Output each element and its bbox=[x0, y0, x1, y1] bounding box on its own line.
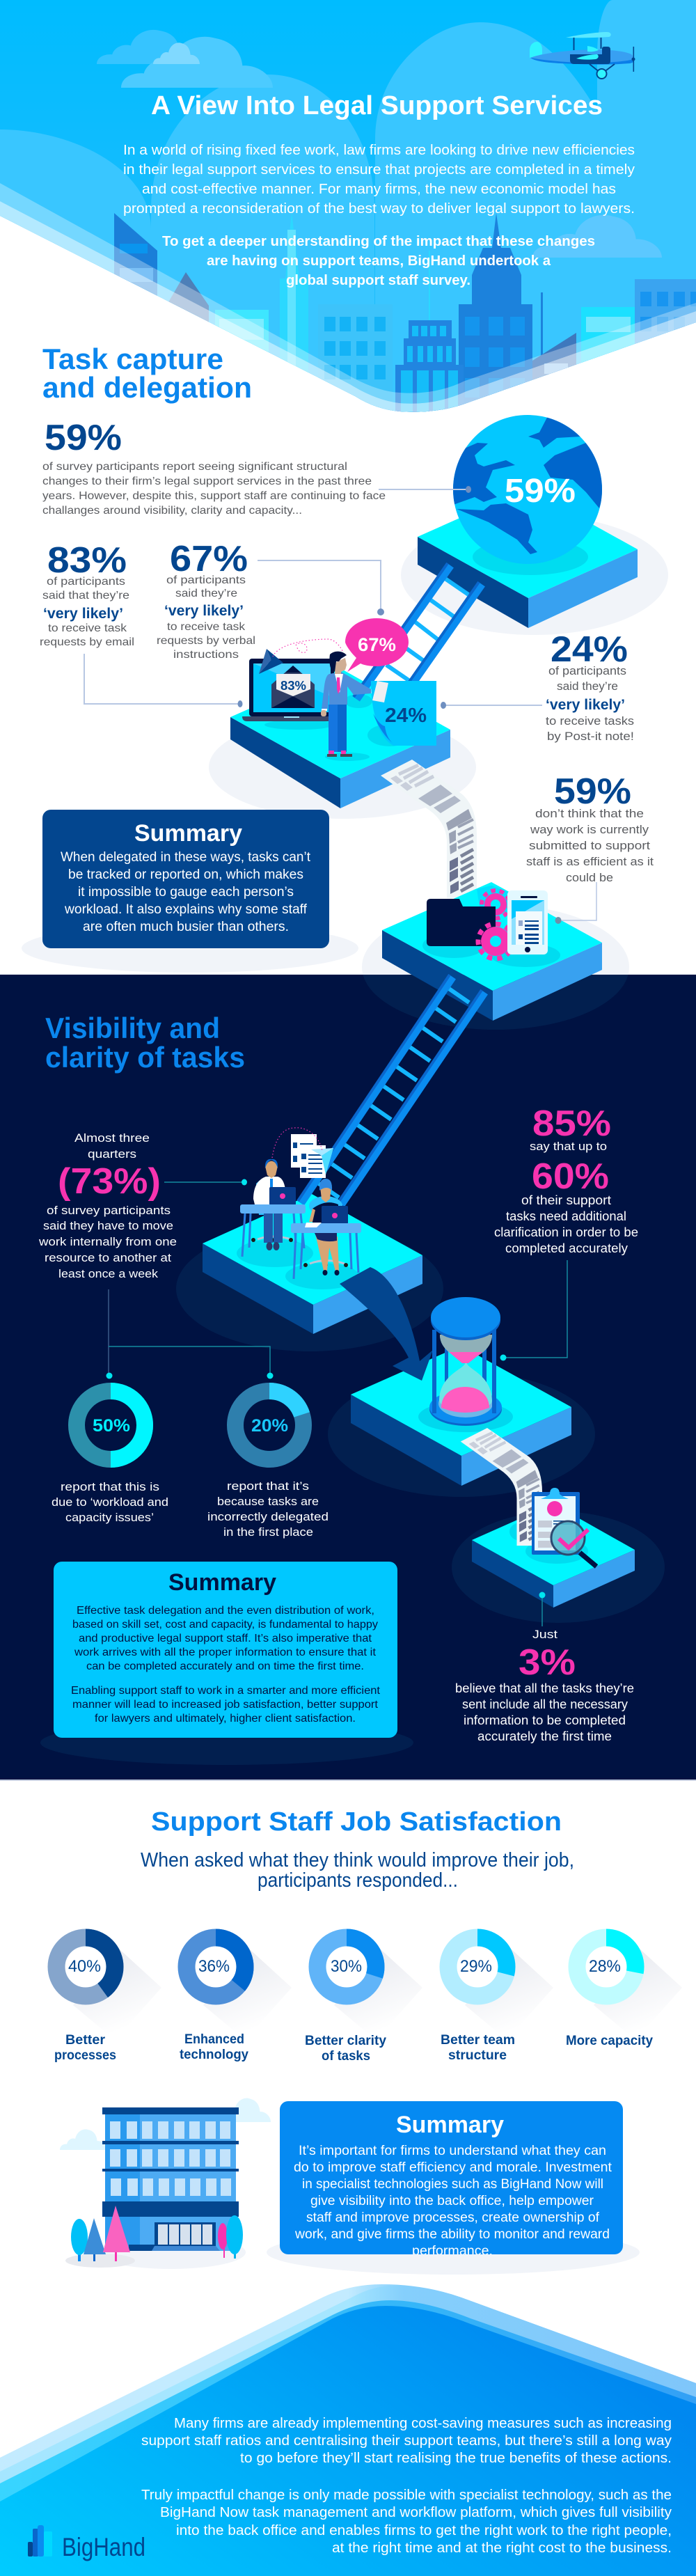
connector lines for task capture bbox=[84, 486, 542, 709]
donut chart: 36 percent enhanced technology: technology bbox=[180, 2048, 248, 2062]
connector lines for visibility section bbox=[106, 1179, 567, 1626]
donut chart: 30 percent better clarity: of tasks bbox=[322, 2049, 370, 2064]
summary box 2: for lawyers and ultimately, higher client satisfaction. bbox=[95, 1713, 356, 1725]
stat: 24 percent post-it: 24% bbox=[551, 629, 628, 670]
connector: 59 percent to platform 3 bbox=[555, 882, 596, 924]
icon: left city buildings bbox=[114, 212, 393, 418]
icon: clipboard and magnifier bbox=[532, 1488, 596, 1566]
subheading: participants responded: participants responded... bbox=[258, 1869, 458, 1892]
icon: post-it note bbox=[371, 681, 436, 746]
summary box 3: in specialist technologies such as BigHand Now will bbox=[302, 2177, 603, 2192]
stat: 83 percent email: to receive task bbox=[48, 622, 127, 634]
stat: 67 percent verbal: 67% bbox=[170, 539, 248, 579]
stat: 67 percent verbal: of participants bbox=[166, 574, 246, 586]
stat: 83 percent email: requests by email bbox=[40, 636, 134, 648]
speech bubble: 67 percent: 67% bbox=[358, 634, 396, 655]
platform 1 with globe bbox=[401, 411, 668, 635]
icon: hourglass bbox=[418, 1297, 513, 1432]
heading: support staff job satisfaction: Support Staff Job Satisfaction bbox=[151, 1807, 562, 1837]
navy section background bbox=[0, 904, 696, 1781]
summary box 2: Summary bbox=[168, 1569, 276, 1596]
icon: globe: 59% bbox=[505, 473, 576, 510]
stat: 73 percent: said they have to move bbox=[43, 1219, 173, 1232]
stat: just 3 percent: believe that all the tasks they’re bbox=[455, 1681, 634, 1695]
icon: right city buildings bbox=[395, 213, 696, 418]
closing text bbox=[141, 2416, 672, 2556]
platform 6 with clipboard bbox=[452, 1504, 665, 1623]
closing text: at the right time and at the right cost to the business. bbox=[332, 2540, 672, 2556]
icon: laptop with envelope: 83% bbox=[280, 679, 306, 693]
stat: 73 percent: resource to another at bbox=[45, 1251, 171, 1264]
stat: 59 percent inefficient submission: staff is as efficient as it bbox=[526, 855, 654, 868]
caption: workload and capacity: due to ‘workload and bbox=[52, 1495, 168, 1509]
donut chart: 29 percent better team structure bbox=[441, 1938, 553, 2063]
stat: 59 percent inefficient submission: 59% bbox=[554, 771, 631, 812]
footer background bbox=[0, 2284, 696, 2576]
caption: incorrectly delegated bbox=[207, 1479, 329, 1539]
icon: man at desk bbox=[240, 1159, 306, 1257]
summary box 2: work arrives with all the proper information to ensure that it bbox=[74, 1647, 377, 1658]
stat: 59 percent inefficient submission: submitted to support bbox=[529, 839, 650, 852]
summary box 2: manner will lead to increased job satisfaction, better support bbox=[72, 1699, 379, 1711]
closing text: support staff ratios and centralising their support teams, but there’s still a long way bbox=[141, 2433, 672, 2449]
intro paragraph: and cost-effective manner. For many firms, the new economic model has bbox=[142, 182, 616, 197]
stat: 24 percent post-it: of participants bbox=[548, 664, 626, 677]
icon: office building with trees bbox=[60, 2098, 271, 2269]
stat: 83 percent email: ‘very likely’ bbox=[43, 606, 123, 622]
closing text: Many firms are already implementing cost-saving measures such as increasing bbox=[174, 2416, 672, 2431]
paper ribbon to clipboard bbox=[461, 1428, 542, 1546]
stat: 67 percent verbal: to receive task bbox=[167, 621, 246, 633]
arrow to hourglass bbox=[340, 1267, 433, 1381]
summary box 3: work, and give firms the ability to monitor and reward bbox=[294, 2227, 610, 2242]
stat: 73 percent: quarters bbox=[88, 1147, 136, 1161]
intro paragraph: in their legal support services to ensure that projects are completed in a timely bbox=[123, 162, 635, 178]
summary box 2: based on skill set, cost and capacity, is fundamental to happy bbox=[72, 1619, 378, 1631]
icon: globe bbox=[445, 411, 604, 564]
summary box 3: give visibility into the back office, help empower bbox=[310, 2194, 594, 2208]
icon: paper plane with dotted trail bbox=[259, 639, 343, 674]
donut chart: 29 percent better team structure: structure bbox=[448, 2048, 507, 2063]
stat: 24 percent post-it: to receive tasks bbox=[546, 714, 634, 728]
stat: 67 percent verbal bbox=[157, 539, 255, 661]
stat: 59 percent structural changes: years. However, despite this, support staff are continuing to face bbox=[42, 490, 386, 502]
ladder 2 bbox=[298, 975, 484, 1204]
logo: BigHand bbox=[28, 2525, 145, 2561]
donut chart: 20 percent bbox=[235, 1391, 303, 1459]
donut chart: 50 percent: 50% bbox=[93, 1416, 130, 1436]
stat: 67 percent verbal: instructions bbox=[173, 649, 239, 661]
caption: workload and capacity: report that this is bbox=[61, 1480, 159, 1493]
stat: just 3 percent: sent include all the necessary bbox=[462, 1697, 628, 1711]
header background: sky with city bbox=[0, 0, 696, 446]
speech bubble: 67 percent bbox=[345, 618, 409, 672]
donut chart: 30 percent better clarity: Better clarity bbox=[305, 2034, 386, 2048]
intro paragraph bbox=[123, 143, 635, 217]
stat: 59 percent structural changes: challanges around visibility, clarity and capacity... bbox=[42, 505, 302, 517]
summary box 2: and productive legal support staff. It’s also imperative that bbox=[79, 1633, 372, 1644]
stat: 67 percent verbal: said they’re bbox=[175, 588, 237, 599]
donut chart: 28 percent more capacity: 28% bbox=[589, 1957, 621, 1976]
heading: visibility and clarity: clarity of tasks bbox=[45, 1041, 245, 1074]
intro paragraph: prompted a reconsideration of the best way to deliver legal support to lawyers. bbox=[123, 201, 635, 217]
stat: 85 percent and 60 percent: tasks need additional bbox=[506, 1209, 626, 1223]
icon: paper in hand bbox=[372, 681, 388, 702]
caption: incorrectly delegated: in the first place bbox=[223, 1525, 313, 1539]
stat: 83 percent email: said that they’re bbox=[42, 590, 129, 602]
summary box 3 bbox=[267, 2101, 640, 2275]
donut chart: 40 percent better processes: processes bbox=[54, 2048, 116, 2063]
heading: task capture and delegation: Task capture bbox=[42, 343, 223, 375]
summary box 3: Summary bbox=[396, 2112, 504, 2138]
donut chart: 40 percent better processes: Better bbox=[65, 2033, 106, 2048]
intro bold statement: global support staff survey. bbox=[286, 273, 470, 288]
stat: just 3 percent: information to be completed bbox=[464, 1713, 626, 1727]
donut chart: 28 percent more capacity bbox=[566, 1938, 682, 2048]
stat: 24 percent post-it: by Post-it note! bbox=[547, 730, 634, 743]
logo: BigHand: BigHand bbox=[62, 2533, 145, 2561]
icon: business person bbox=[321, 652, 377, 757]
stat: 24 percent post-it bbox=[546, 629, 634, 743]
stat: 85 percent and 60 percent: clarification in order to be bbox=[494, 1225, 638, 1239]
stat: 73 percent: Almost three bbox=[74, 1131, 150, 1145]
summary box 1: workload. It also explains why some staff bbox=[64, 902, 308, 917]
summary box 2 bbox=[40, 1562, 413, 1765]
closing text: BigHand Now task management and workflow platform, which gives full visibility bbox=[160, 2505, 672, 2520]
summary box 2: can be completed accurately and on time the first time. bbox=[86, 1660, 364, 1672]
closing text: into the back office and enables firms to get the right work to the right people, bbox=[176, 2523, 672, 2538]
icon: plane bbox=[530, 32, 635, 79]
heading: task capture and delegation: and delegation bbox=[42, 371, 252, 404]
caption: incorrectly delegated: incorrectly delegated bbox=[207, 1510, 329, 1523]
donut chart: 30 percent better clarity bbox=[305, 1938, 422, 2064]
stat: 59 percent inefficient submission bbox=[526, 771, 654, 884]
donut chart: 30 percent better clarity: 30% bbox=[331, 1957, 362, 1976]
stat: 85 percent and 60 percent: 85% bbox=[532, 1104, 611, 1144]
heading: visibility and clarity: Visibility and bbox=[45, 1012, 220, 1044]
summary box 2: Enabling support staff to work in a smarter and more efficient bbox=[71, 1685, 381, 1697]
summary box 1: it impossible to gauge each person’s bbox=[78, 885, 294, 900]
donut chart: 20 percent: 20% bbox=[251, 1416, 288, 1436]
stat: 85 percent and 60 percent: of their support bbox=[521, 1193, 611, 1207]
icon: documents and paper plane bbox=[272, 1128, 333, 1178]
summary box 1: be tracked or reported on, which makes bbox=[68, 867, 303, 882]
icon: post-it note: 24% bbox=[385, 705, 427, 727]
icon: small gear bbox=[482, 890, 509, 918]
closing text: Truly impactful change is only made possible with specialist technology, such as the bbox=[141, 2488, 672, 2503]
donut chart: 40 percent better processes bbox=[54, 1938, 161, 2063]
summary box 3: It’s important for firms to understand what they can bbox=[299, 2144, 606, 2158]
donut chart: 28 percent more capacity: More capacity bbox=[566, 2034, 653, 2048]
stat: 59 percent structural changes bbox=[42, 418, 386, 517]
platform 4 with desks bbox=[176, 975, 484, 1351]
platform 2 with laptop and person bbox=[209, 563, 482, 819]
stat: 24 percent post-it: said they’re bbox=[557, 680, 618, 693]
stat: 73 percent bbox=[38, 1131, 177, 1280]
platform 3 with folder gears and phone bbox=[382, 877, 602, 1021]
stat: just 3 percent: Just bbox=[532, 1628, 557, 1641]
stat: 59 percent structural changes: of survey participants report seeing significant structural bbox=[42, 461, 347, 473]
summary box 3: do to improve staff efficiency and morale. Investment bbox=[294, 2160, 612, 2175]
intro bold statement bbox=[162, 234, 595, 288]
paper ribbon between platforms bbox=[381, 760, 477, 898]
summary box 1: When delegated in these ways, tasks can’t bbox=[61, 850, 311, 865]
stat: 59 percent inefficient submission: don’t think that the bbox=[535, 807, 644, 820]
summary box 1 bbox=[22, 810, 358, 973]
stat: 83 percent email: 83% bbox=[47, 540, 127, 581]
stat: 85 percent and 60 percent: 60% bbox=[532, 1156, 609, 1197]
intro bold statement: are having on support teams, BigHand undertook a bbox=[207, 253, 551, 269]
stat: just 3 percent bbox=[455, 1628, 634, 1743]
caption: incorrectly delegated: because tasks are bbox=[217, 1495, 319, 1508]
closing text: to go before they’ll start realising the true benefits of these actions. bbox=[240, 2451, 672, 2466]
icon: folder bbox=[427, 899, 496, 946]
icon: laptop with envelope bbox=[242, 659, 340, 721]
summary box 3: staff and improve processes, create ownership of bbox=[306, 2210, 600, 2225]
title: A View Into Legal Support Services bbox=[151, 91, 603, 120]
icon: large gear bbox=[478, 924, 513, 959]
caption: incorrectly delegated: report that it’s bbox=[227, 1479, 309, 1493]
summary box 3: performance. bbox=[412, 2244, 493, 2259]
intro paragraph: In a world of rising fixed fee work, law firms are looking to drive new efficiencies bbox=[123, 143, 635, 158]
stat: 73 percent: least once a week bbox=[58, 1267, 159, 1280]
stat: 59 percent inefficient submission: way work is currently bbox=[530, 823, 649, 836]
stat: 24 percent post-it: ‘very likely’ bbox=[546, 697, 625, 713]
stat: 85 percent and 60 percent bbox=[494, 1104, 638, 1255]
donut chart: 36 percent enhanced technology: 36% bbox=[198, 1957, 230, 1976]
stat: 85 percent and 60 percent: completed accurately bbox=[505, 1241, 628, 1255]
summary box 1: are often much busier than others. bbox=[83, 920, 289, 934]
ladder 1 bbox=[354, 563, 482, 699]
stat: 73 percent: of survey participants bbox=[47, 1204, 171, 1217]
donut chart: 29 percent better team structure: Better team bbox=[441, 2033, 515, 2048]
heading: visibility and clarity bbox=[45, 1012, 245, 1074]
stat: 83 percent email bbox=[40, 540, 134, 648]
caption: workload and capacity: capacity issues’ bbox=[65, 1511, 154, 1524]
donut chart: 36 percent enhanced technology: Enhanced bbox=[184, 2032, 244, 2047]
stat: 73 percent: work internally from one bbox=[38, 1235, 177, 1248]
donut chart: 36 percent enhanced technology bbox=[180, 1938, 292, 2062]
icon: woman at desk bbox=[291, 1179, 361, 1279]
stat: 59 percent inefficient submission: could be bbox=[566, 871, 613, 884]
stat: 85 percent and 60 percent: say that up to bbox=[530, 1140, 607, 1153]
stat: 67 percent verbal: requests by verbal bbox=[157, 635, 255, 647]
stat: 83 percent email: of participants bbox=[47, 576, 125, 588]
subheading: participants responded: When asked what they think would improve their job, bbox=[141, 1849, 574, 1871]
heading: task capture and delegation bbox=[42, 343, 252, 404]
stat: 73 percent: (73%) bbox=[58, 1161, 161, 1202]
stat: 59 percent structural changes: changes to their firm’s legal support services in the past three bbox=[42, 476, 372, 487]
subheading: participants responded bbox=[141, 1849, 574, 1892]
donut chart: 40 percent better processes: 40% bbox=[68, 1957, 101, 1976]
summary box 2: Effective task delegation and the even distribution of work, bbox=[77, 1605, 374, 1617]
stat: 59 percent structural changes: 59% bbox=[45, 418, 122, 458]
platform 5 bbox=[328, 1346, 595, 1497]
caption: workload and capacity bbox=[52, 1480, 168, 1524]
summary box 1: Summary bbox=[134, 820, 242, 847]
intro bold statement: To get a deeper understanding of the impact that these changes bbox=[162, 234, 595, 249]
stat: just 3 percent: accurately the first time bbox=[477, 1729, 612, 1743]
donut chart: 50 percent bbox=[77, 1391, 145, 1459]
donut chart: 29 percent better team structure: 29% bbox=[460, 1957, 492, 1976]
icon: phone bbox=[507, 890, 548, 955]
stat: just 3 percent: 3% bbox=[519, 1642, 576, 1683]
stat: 67 percent verbal: ‘very likely’ bbox=[164, 603, 244, 619]
